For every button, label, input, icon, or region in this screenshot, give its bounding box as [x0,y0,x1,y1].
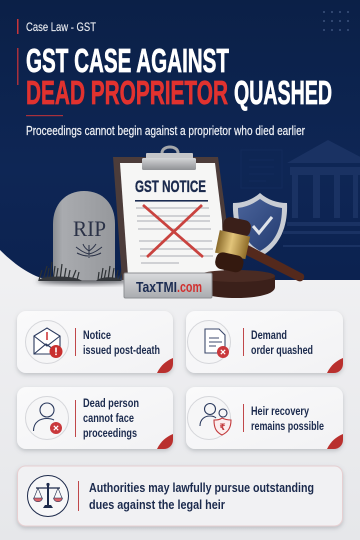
grass [39,262,122,280]
icon: heir with rupee shield [188,396,231,440]
card: notice issued post-death: issued post-death [83,345,160,357]
notice paper [120,163,224,276]
icon: document cancelled [188,320,230,364]
card: notice issued post-death [17,311,173,373]
title [17,42,332,111]
TaxTMI nameplate [124,273,212,298]
card: dead person cannot face proceedings: proceedings [83,428,137,440]
clipboard [113,147,227,280]
card: dead person cannot face proceedings: Dead person [83,398,139,410]
category tag: Case Law - GST [26,20,97,34]
faint courthouse [283,140,360,247]
tombstone [37,191,133,284]
icon: heir with rupee shield: ₹ [219,423,226,433]
notice heading: GST NOTICE [135,177,206,196]
takeaway card: Authorities may lawfully pursue outstanding [89,480,314,495]
title: DEAD PROPRIETOR [26,74,228,111]
category tag [17,19,97,34]
navy header background [0,0,360,280]
gavel [197,215,304,298]
card: dead person cannot face proceedings [17,387,173,449]
decorative dot grid [323,11,349,31]
faint document [241,150,282,188]
card: dead person cannot face proceedings: cannot face [83,413,134,425]
laurel [76,244,102,258]
title underline [26,115,63,116]
shield [233,193,287,257]
clip [142,147,196,170]
TaxTMI nameplate: .com [177,279,202,296]
card: demand order quashed: order quashed [251,345,313,357]
card: heir recovery remains possible [186,387,343,449]
title: GST CASE AGAINST [26,42,229,79]
icon: person cancelled [26,396,68,440]
card: demand order quashed [186,311,343,373]
TaxTMI nameplate: TaxTMI [136,279,177,296]
takeaway card [18,466,342,526]
handle [242,244,304,281]
card: notice issued post-death: Notice [83,330,111,342]
base [197,276,275,298]
card: heir recovery remains possible: Heir recovery [251,406,309,418]
icon: scales of justice [28,476,68,516]
takeaway card: dues against the legal heir [89,497,225,512]
red cross [143,205,203,257]
head [212,215,253,274]
icon: envelope alert [26,320,68,364]
card: heir recovery remains possible: remains possible [251,421,324,433]
card: demand order quashed: Demand [251,330,287,342]
text lines [136,208,213,263]
RIP lettering: RIP [73,216,106,241]
